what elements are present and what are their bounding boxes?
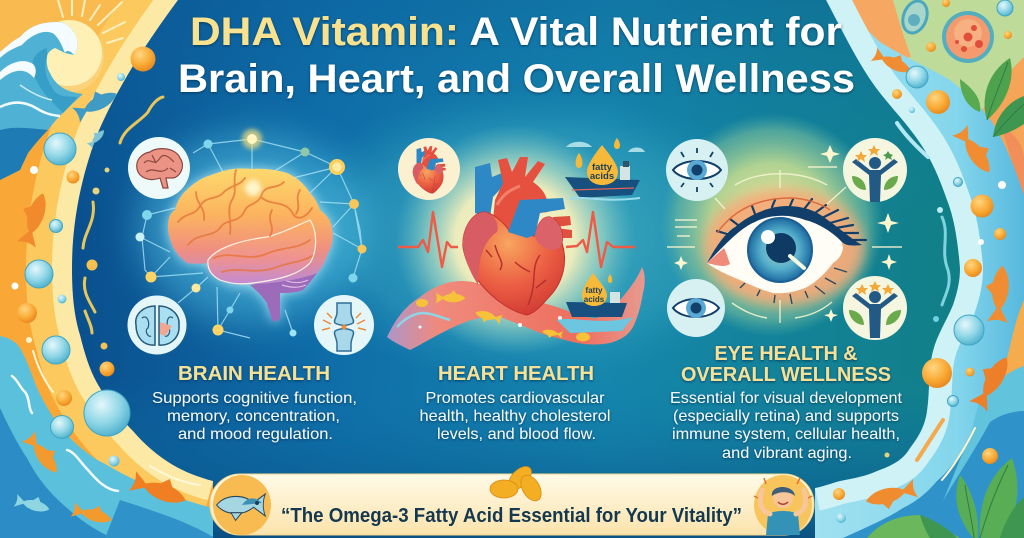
top right leaves — [960, 58, 1024, 137]
orange fish upper right — [952, 123, 1000, 178]
ECG line left — [398, 212, 458, 267]
temporal lobe — [208, 220, 316, 284]
icon: fish badge — [213, 475, 271, 535]
lower left water — [0, 336, 230, 538]
orange fish lower left — [22, 429, 66, 478]
cerebellum and stem — [250, 273, 317, 321]
blood vessel ribbon — [387, 267, 645, 350]
ECG line right — [566, 212, 635, 267]
icon: happy man badge — [754, 475, 812, 535]
icon: eye circle bottom — [667, 279, 725, 337]
icon: fatty acids ship bottom — [557, 273, 633, 333]
sun — [34, 0, 125, 92]
text: eye health description: and vibrant aging. — [722, 445, 852, 462]
text: brain health description — [152, 390, 357, 443]
icon: fatty acids ship top: acids — [590, 171, 614, 182]
icon: brain cross section — [128, 296, 186, 354]
orange fish left — [13, 189, 53, 248]
title — [178, 10, 855, 101]
icon: wellness figure top — [843, 138, 907, 202]
brain illustration — [168, 168, 333, 321]
orange fish lower right — [966, 350, 1016, 412]
ocean wave — [0, 22, 83, 180]
banner pill — [210, 474, 814, 535]
right scenery: foliage, flowing band, water — [800, 0, 1024, 538]
pale small fish — [85, 127, 107, 149]
title line 2: Brain, Heart, and Overall Wellness — [178, 57, 855, 101]
left scenery: golden band base — [0, 0, 230, 538]
eye illustration — [707, 198, 866, 304]
lashes — [717, 199, 866, 240]
text: brain health description: memory, concentration, — [167, 408, 340, 425]
panel: brain health — [128, 129, 374, 443]
icon: small heart — [398, 138, 460, 200]
lower right field — [815, 290, 1024, 538]
citrus cell — [942, 11, 994, 63]
icon: joint — [314, 295, 374, 355]
central light glow — [280, 85, 780, 385]
icon: fatty acids ship bottom: acids — [584, 295, 605, 304]
icon: fatty acids ship top: fatty — [592, 162, 613, 173]
upper lid — [707, 206, 862, 263]
orange fish bottom — [129, 467, 191, 510]
title line 1: DHA Vitamin: A Vital Nutrient for — [190, 10, 842, 54]
decorative squiggles — [83, 97, 975, 480]
blue fish — [70, 83, 121, 123]
text: brain health description: Supports cognitive function, — [152, 390, 357, 407]
oval capsule cell — [897, 0, 933, 38]
bottom right leaves — [920, 458, 1024, 538]
icon: capsules — [490, 462, 545, 504]
text: eye health description — [670, 390, 903, 462]
heading: heart health: HEART HEALTH — [438, 363, 594, 385]
text: eye health description: immune system, cellular health, — [672, 426, 900, 443]
eye glow ring — [704, 189, 864, 305]
text: heart health description: levels, and blood flow. — [437, 426, 596, 443]
bottom right ground — [867, 515, 960, 538]
icon: brain outline — [128, 137, 190, 199]
panel: heart health — [387, 125, 645, 443]
text: heart health description: health, healthy cholesterol — [420, 408, 610, 425]
small orange fish bottom — [71, 499, 115, 527]
text: eye health description: (especially retina) and supports — [673, 408, 899, 425]
heart illustration — [463, 157, 572, 315]
text: brain health description: and mood regulation. — [178, 426, 333, 443]
icon: wellness figure bottom — [843, 276, 907, 340]
text: eye health description: Essential for visual development — [670, 390, 903, 407]
panel: eye health and overall wellness — [660, 113, 907, 462]
neural network — [136, 129, 367, 338]
orange fish middle right — [983, 265, 1013, 323]
heading: brain health: BRAIN HEALTH — [178, 363, 330, 385]
heading: eye health: EYE HEALTH & — [714, 343, 858, 365]
icon: eye circle top — [666, 139, 728, 201]
sparkles — [674, 145, 899, 322]
gyri — [178, 170, 312, 272]
upper right field — [830, 0, 1024, 240]
fish oil fish — [436, 290, 465, 304]
icon: fatty acids ship top — [565, 138, 645, 200]
banner — [210, 462, 814, 535]
iris — [748, 218, 812, 282]
heading: overall wellness: OVERALL WELLNESS — [681, 364, 891, 386]
banner slogan: “The Omega-3 Fatty Acid Essential for Your Vitality” — [281, 504, 742, 527]
orange fish: small top — [871, 45, 915, 78]
eye halo — [660, 113, 884, 337]
heart glow — [395, 125, 635, 355]
flowing band — [800, 0, 1024, 538]
cerebrum — [168, 168, 333, 284]
pale fish bottom — [14, 491, 52, 516]
crosshair lines — [667, 167, 902, 323]
text: heart health description: Promotes cardiovascular — [426, 390, 605, 407]
text: heart health description — [420, 390, 610, 443]
icon: fatty acids ship bottom: fatty — [586, 286, 603, 295]
orange fish bottom right — [864, 479, 919, 514]
